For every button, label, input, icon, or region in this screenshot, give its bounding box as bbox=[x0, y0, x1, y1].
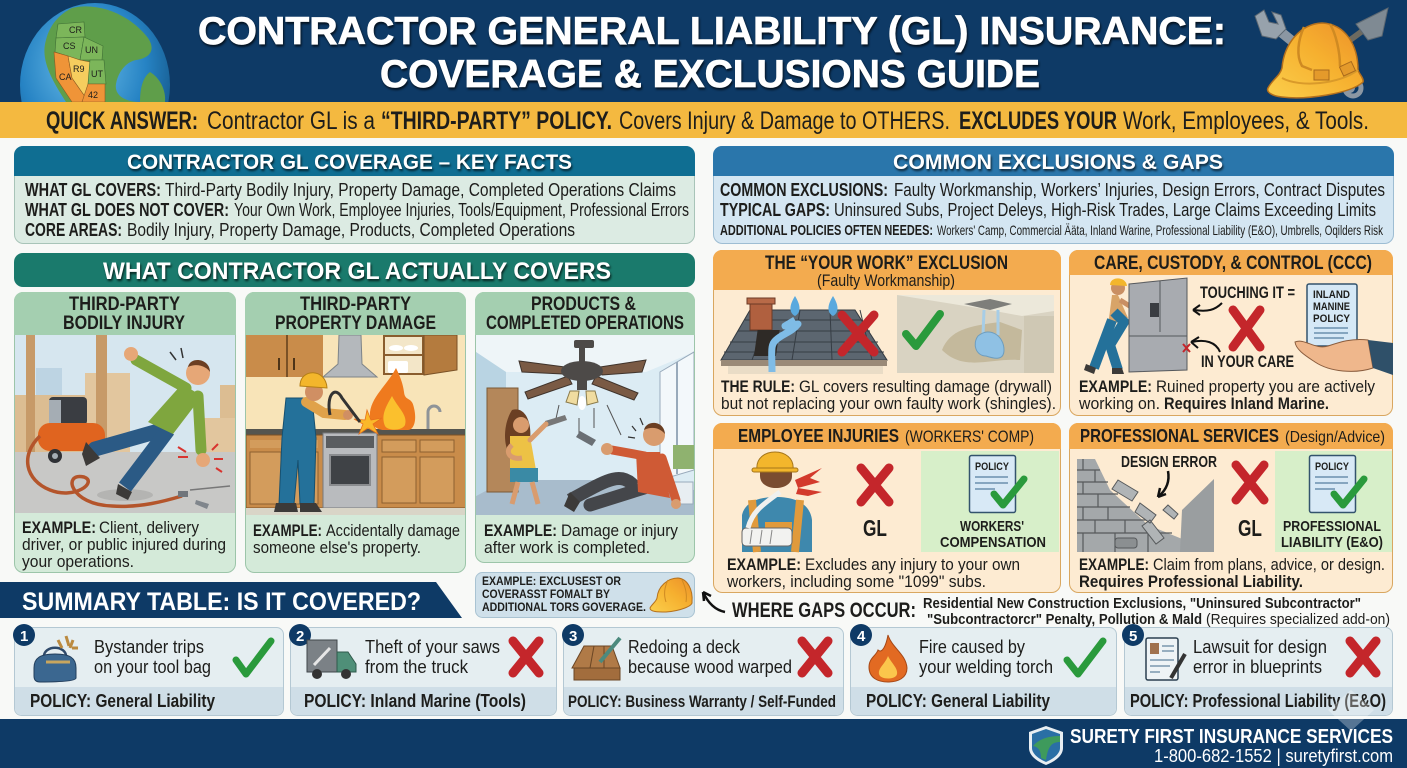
panel: your work exclusion bbox=[713, 250, 1061, 416]
icon: globe with state map: UT bbox=[91, 69, 103, 79]
example text: EXAMPLE: bbox=[1079, 377, 1152, 396]
icon: document with pen bbox=[1146, 638, 1185, 680]
text bbox=[94, 637, 211, 677]
heading: COMPLETED OPERATIONS bbox=[486, 313, 684, 334]
example text: EXAMPLE: bbox=[253, 521, 322, 540]
quick answer band: “THIRD-PARTY” POLICY. bbox=[381, 107, 612, 135]
badge bbox=[562, 624, 584, 646]
example text: EXAMPLE: bbox=[1079, 555, 1149, 574]
label: touching it and in your care bbox=[1191, 283, 1295, 371]
panel: key facts bbox=[14, 146, 695, 244]
example text: EXAMPLE: bbox=[22, 518, 96, 537]
callout: example box with helmet: EXAMPLE: EXCLUSEST OR bbox=[482, 574, 621, 588]
example text: Accidentally damage bbox=[326, 521, 460, 540]
illustration: worker moving refrigerator bbox=[1084, 278, 1190, 374]
heading: BODILY INJURY bbox=[63, 313, 185, 334]
example text: working on. bbox=[1078, 394, 1160, 413]
example text bbox=[1078, 377, 1375, 413]
title: CONTRACTOR GENERAL LIABILITY (GL) INSURANCE: bbox=[198, 10, 1226, 53]
example text bbox=[726, 555, 1020, 591]
heading bbox=[486, 294, 684, 334]
icon: globe with state map: R9 bbox=[73, 64, 85, 74]
icon: red cross GL bbox=[1236, 465, 1264, 541]
text: Theft of your saws bbox=[365, 637, 500, 657]
arrow: to example box bbox=[703, 592, 725, 612]
policy: POLICY: General Liability bbox=[866, 691, 1050, 711]
exclusions text: COMMON EXCLUSIONS: bbox=[720, 180, 888, 200]
icon: tool bag bbox=[34, 636, 78, 682]
banner: summary table heading: SUMMARY TABLE: IS IT COVERED? bbox=[22, 588, 421, 616]
label: touching it and in your care: TOUCHING IT = bbox=[1200, 283, 1295, 302]
badge: 5 bbox=[1129, 628, 1137, 645]
panel: products and completed operations bbox=[475, 292, 695, 562]
example text: someone else's property. bbox=[253, 538, 421, 557]
quick answer band: QUICK ANSWER: bbox=[46, 107, 198, 135]
header band bbox=[0, 0, 1407, 102]
heading: PRODUCTS & bbox=[531, 294, 636, 315]
heading bbox=[765, 253, 1008, 290]
example text bbox=[1079, 555, 1385, 591]
heading bbox=[275, 294, 436, 334]
heading bbox=[738, 426, 1034, 446]
text: your welding torch bbox=[919, 657, 1053, 677]
illustration: client tripping over hose bbox=[15, 335, 236, 513]
panel: professional liability: PROFESSIONAL bbox=[1283, 518, 1381, 535]
icon: globe with state map: CR bbox=[69, 25, 82, 35]
icon: fire bbox=[869, 635, 907, 682]
summary row 5: design lawsuit bbox=[1122, 624, 1392, 716]
where gaps occur: (Requires specialized add-on) bbox=[1206, 611, 1390, 628]
badge bbox=[13, 624, 35, 646]
policy: POLICY: Inland Marine (Tools) bbox=[304, 691, 526, 711]
example text: your operations. bbox=[22, 552, 134, 571]
badge bbox=[850, 624, 872, 646]
where gaps occur bbox=[732, 595, 1390, 628]
illustration: injured worker bbox=[742, 452, 822, 552]
heading: (Design/Advice) bbox=[1285, 429, 1385, 446]
badge: 1 bbox=[20, 628, 28, 645]
summary row 4: welding fire bbox=[850, 624, 1116, 716]
callout: example box with helmet: COVERASST FOMALT BY bbox=[482, 587, 610, 601]
callout: example box with helmet: ADDITIONAL TORS GOVERAGE. bbox=[482, 600, 646, 614]
key facts text: Your Own Work, Employee Injuries, Tools/Equipment, Professional Errors bbox=[234, 200, 689, 220]
example text: EXAMPLE: bbox=[484, 521, 557, 540]
badge bbox=[1122, 624, 1144, 646]
heading: THE “YOUR WORK” EXCLUSION bbox=[765, 253, 1008, 274]
text bbox=[628, 637, 792, 677]
quick answer band: Covers Injury & Damage to OTHERS. bbox=[619, 107, 950, 135]
icon: globe with state map: CS bbox=[63, 41, 76, 51]
heading: what contractor GL actually covers bbox=[14, 253, 695, 287]
icon: red cross GL: GL bbox=[863, 515, 887, 541]
text: Redoing a deck bbox=[628, 637, 741, 657]
heading: EMPLOYEE INJURIES bbox=[738, 426, 899, 446]
example text: after work is completed. bbox=[484, 538, 650, 557]
panel: common exclusions and gaps bbox=[713, 146, 1394, 244]
icon: check bbox=[1067, 641, 1103, 674]
example text bbox=[484, 521, 678, 557]
icon: globe with state map: UN bbox=[85, 45, 98, 55]
example text: Client, delivery bbox=[99, 518, 199, 537]
key facts text: WHAT GL COVERS: bbox=[25, 180, 161, 200]
heading: what contractor GL actually covers: WHAT CONTRACTOR GL ACTUALLY COVERS bbox=[103, 258, 611, 285]
text bbox=[1193, 637, 1327, 677]
panel: professional services bbox=[1069, 423, 1393, 592]
badge bbox=[289, 624, 311, 646]
where gaps occur: WHERE GAPS OCCUR: bbox=[732, 599, 916, 622]
key facts text: Bodily Injury, Property Damage, Products, Completed Operations bbox=[127, 220, 575, 240]
example text: Ruined property you are actively bbox=[1156, 377, 1375, 396]
icon: globe with state map: 42 bbox=[88, 90, 98, 100]
key facts text bbox=[25, 180, 689, 240]
policy: POLICY: Business Warranty / Self-Funded bbox=[568, 692, 836, 711]
example text: EXAMPLE: bbox=[727, 555, 801, 574]
heading: THIRD-PARTY bbox=[300, 294, 411, 315]
icon: red cross GL: GL bbox=[1238, 515, 1262, 541]
panel: workers' compensation bbox=[921, 451, 1059, 552]
key facts text: CORE AREAS: bbox=[25, 220, 122, 240]
panel: professional liability: LIABILITY (E&O) bbox=[1281, 534, 1383, 551]
key facts text: WHAT GL DOES NOT COVER: bbox=[25, 200, 229, 220]
rule text: but not replacing your own faulty work (shingles). bbox=[721, 394, 1056, 413]
text: on your tool bag bbox=[94, 657, 211, 677]
example text: Requires Professional Liability. bbox=[1079, 572, 1303, 591]
heading: PROPERTY DAMAGE bbox=[275, 313, 436, 334]
icon: globe with state map bbox=[20, 3, 170, 102]
label: touching it and in your care: IN YOUR CARE bbox=[1201, 352, 1294, 371]
quick answer band: EXCLUDES YOUR bbox=[959, 107, 1117, 135]
heading bbox=[63, 294, 185, 334]
icon: red cross GL bbox=[861, 468, 889, 541]
illustration: ceiling fan falling bbox=[476, 335, 694, 515]
example text bbox=[22, 518, 226, 571]
icon: cross bbox=[1350, 641, 1376, 673]
icon: inland marine policy on hand: MANINE bbox=[1313, 301, 1350, 313]
text: error in blueprints bbox=[1193, 657, 1322, 677]
watermark diamond bbox=[1328, 690, 1374, 731]
heading: (Faulty Workmanship) bbox=[817, 271, 955, 290]
callout: example box with helmet bbox=[476, 572, 694, 618]
badge: 4 bbox=[857, 628, 866, 645]
summary row 1: tool bag bbox=[13, 624, 284, 716]
text: Bystander trips bbox=[94, 637, 204, 657]
summary row 3: warped deck bbox=[562, 624, 844, 716]
exclusions text: TYPICAL GAPS: bbox=[720, 200, 830, 220]
icon: inland marine policy on hand: POLICY bbox=[1313, 313, 1351, 325]
heading: THIRD-PARTY bbox=[69, 294, 180, 315]
panel: third-party bodily injury bbox=[14, 292, 236, 572]
quick answer band: Contractor GL is a bbox=[207, 107, 375, 135]
title: COVERAGE & EXCLUSIONS GUIDE bbox=[380, 53, 1040, 96]
example text: Excludes any injury to your own bbox=[805, 555, 1020, 574]
rule text: THE RULE: bbox=[721, 377, 795, 396]
heading: key facts: CONTRACTOR GL COVERAGE – KEY FACTS bbox=[127, 151, 572, 174]
title bbox=[198, 10, 1226, 96]
text bbox=[919, 637, 1053, 677]
icon: cross bbox=[802, 641, 828, 673]
panel: workers' compensation: COMPENSATION bbox=[940, 534, 1046, 551]
icon: inland marine policy on hand bbox=[1295, 284, 1393, 375]
exclusions text: ADDITIONAL POLICIES OFTEN NEEDES: bbox=[720, 222, 933, 239]
example text: driver, or public injured during bbox=[22, 535, 226, 554]
text bbox=[365, 637, 500, 677]
illustration: leaking roof bbox=[721, 296, 887, 374]
footer band bbox=[0, 719, 1407, 768]
icon: check bbox=[236, 641, 271, 674]
heading: exclusions: COMMON EXCLUSIONS & GAPS bbox=[893, 151, 1223, 174]
summary row 2: stolen saws bbox=[289, 624, 556, 716]
panel: care custody and control bbox=[1069, 250, 1393, 416]
heading: (WORKERS' COMP) bbox=[905, 427, 1034, 446]
key facts text: Third-Party Bodily Injury, Property Damage, Completed Operations Claims bbox=[165, 180, 676, 200]
text: because wood warped bbox=[628, 657, 792, 677]
panel: professional liability bbox=[1275, 451, 1392, 552]
exclusions text bbox=[720, 180, 1385, 239]
badge: 2 bbox=[296, 628, 304, 645]
example text: workers, including some "1099" subs. bbox=[726, 572, 986, 591]
panel: employee injuries bbox=[713, 423, 1061, 592]
rule text bbox=[721, 377, 1056, 413]
quick answer band bbox=[0, 102, 1407, 138]
illustration: welding fire in kitchen bbox=[246, 335, 466, 515]
icon: inland marine policy on hand: INLAND bbox=[1313, 289, 1350, 301]
text: from the truck bbox=[365, 657, 469, 677]
policy: POLICY: General Liability bbox=[30, 691, 215, 711]
text: Fire caused by bbox=[919, 637, 1025, 657]
icon: red cross bbox=[1233, 310, 1260, 347]
text: Lawsuit for design bbox=[1193, 637, 1327, 657]
illustration: water-stained drywall bbox=[897, 295, 1054, 373]
heading: PROFESSIONAL SERVICES bbox=[1080, 426, 1279, 446]
panel: workers' compensation: WORKERS' bbox=[960, 518, 1024, 535]
example text: Damage or injury bbox=[561, 521, 678, 540]
footer brand block: 1-800-682-1552 | suretyfirst.com bbox=[1154, 746, 1393, 766]
illustration: collapsing brick wall bbox=[1077, 454, 1217, 552]
icon: deck planks bbox=[572, 638, 620, 680]
icon: truck bbox=[307, 640, 356, 679]
where gaps occur: "Subcontractorcr" Penalty, Pollution & Mald bbox=[927, 611, 1202, 628]
badge: 3 bbox=[569, 628, 577, 645]
rule text: GL covers resulting damage (drywall) bbox=[799, 377, 1052, 396]
panel: workers' compensation: POLICY bbox=[975, 461, 1010, 473]
icon: cross bbox=[513, 641, 539, 673]
panel: professional liability: POLICY bbox=[1315, 461, 1350, 473]
panel: third-party property damage bbox=[245, 292, 466, 572]
illustration: collapsing brick wall: DESIGN ERROR bbox=[1121, 454, 1217, 471]
icon: globe with state map: CA bbox=[59, 72, 72, 82]
example text: Requires Inland Marine. bbox=[1164, 394, 1329, 413]
icon: hard hat with wrench and shovel bbox=[1255, 8, 1388, 98]
example text bbox=[253, 521, 460, 557]
footer brand block bbox=[1029, 726, 1393, 766]
